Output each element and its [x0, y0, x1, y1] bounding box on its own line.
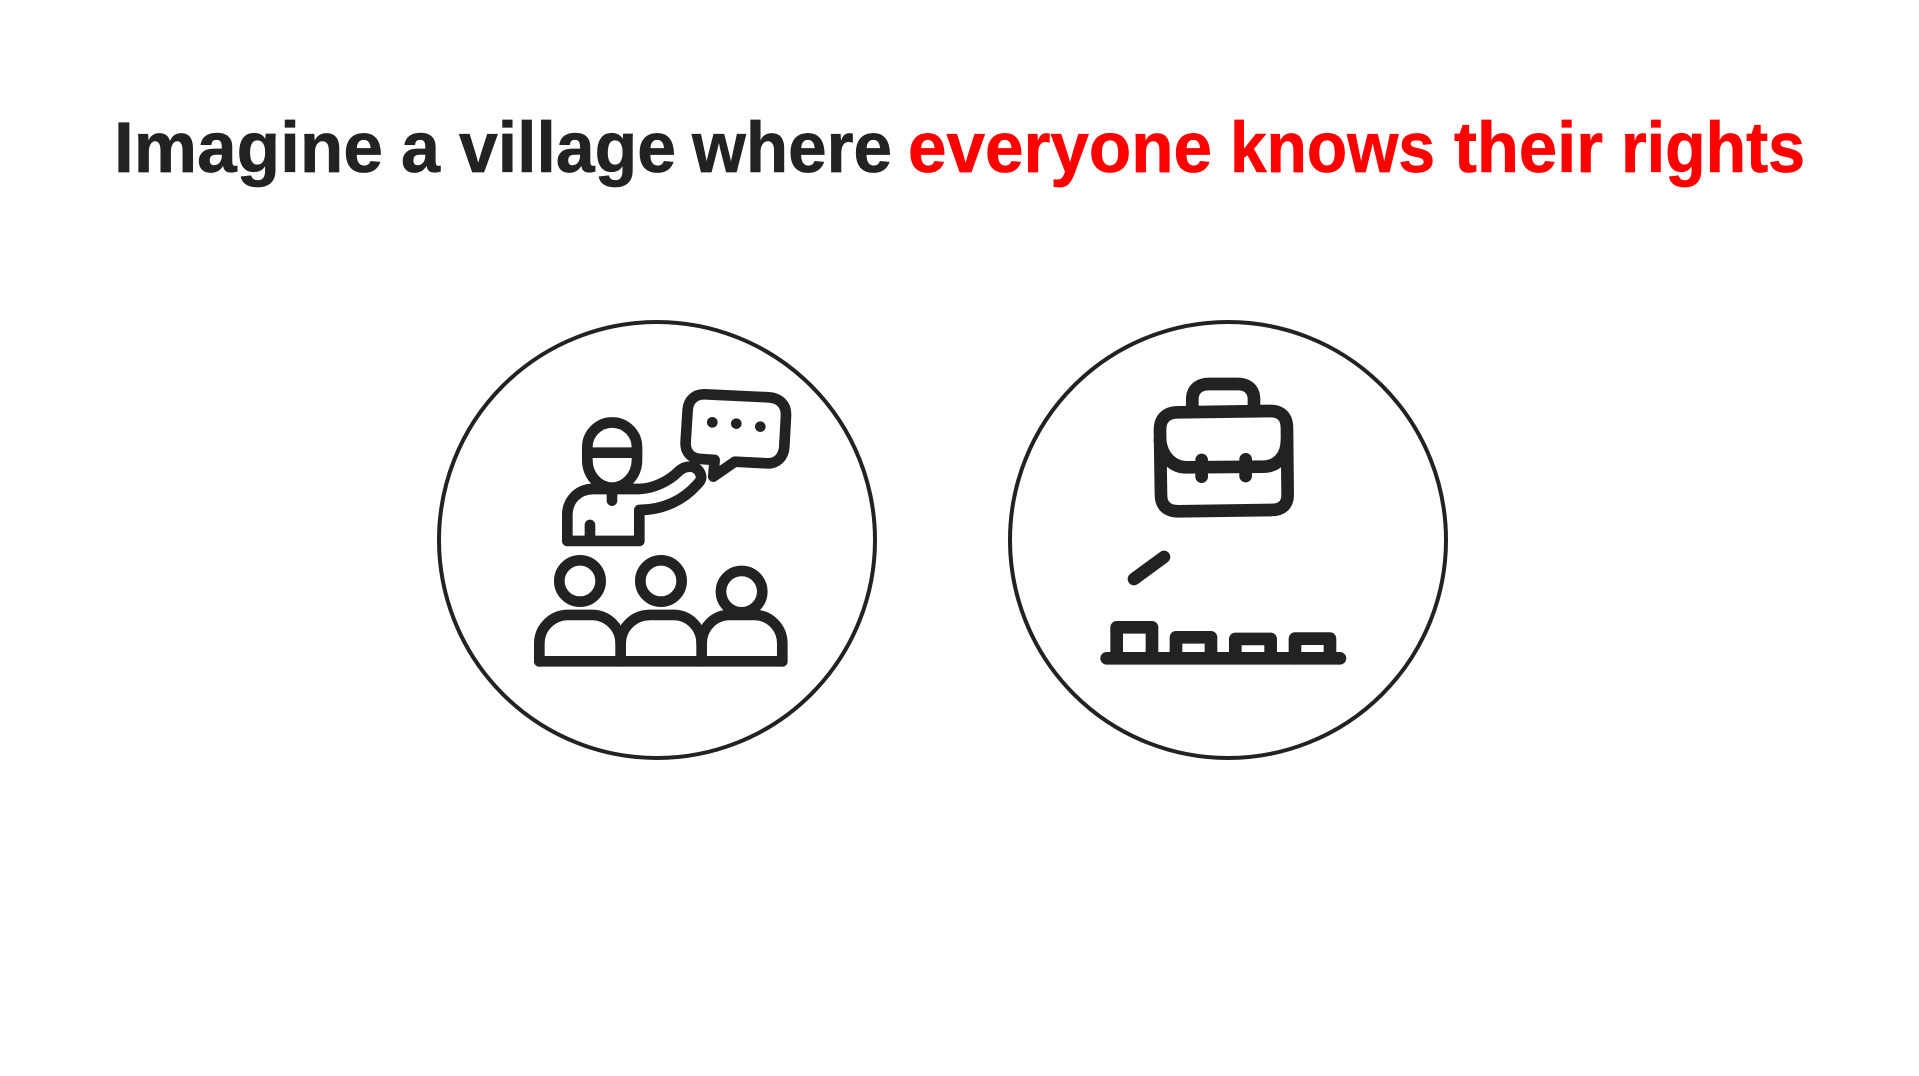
title: rights: [1621, 109, 1805, 188]
panel: community education circle: [439, 322, 875, 758]
title: [114, 109, 1805, 188]
title: Imagine: [114, 109, 383, 188]
title: knows: [1230, 109, 1435, 188]
title: everyone: [908, 109, 1212, 188]
panel: work and livelihoods circle: [1010, 322, 1446, 758]
title: village: [459, 109, 676, 188]
title: where: [691, 109, 892, 188]
icon: briefcase with partial baseline: [1107, 384, 1340, 658]
icon: speaker addressing an audience: [539, 394, 786, 661]
title: their: [1454, 109, 1603, 188]
title: a: [401, 109, 440, 188]
